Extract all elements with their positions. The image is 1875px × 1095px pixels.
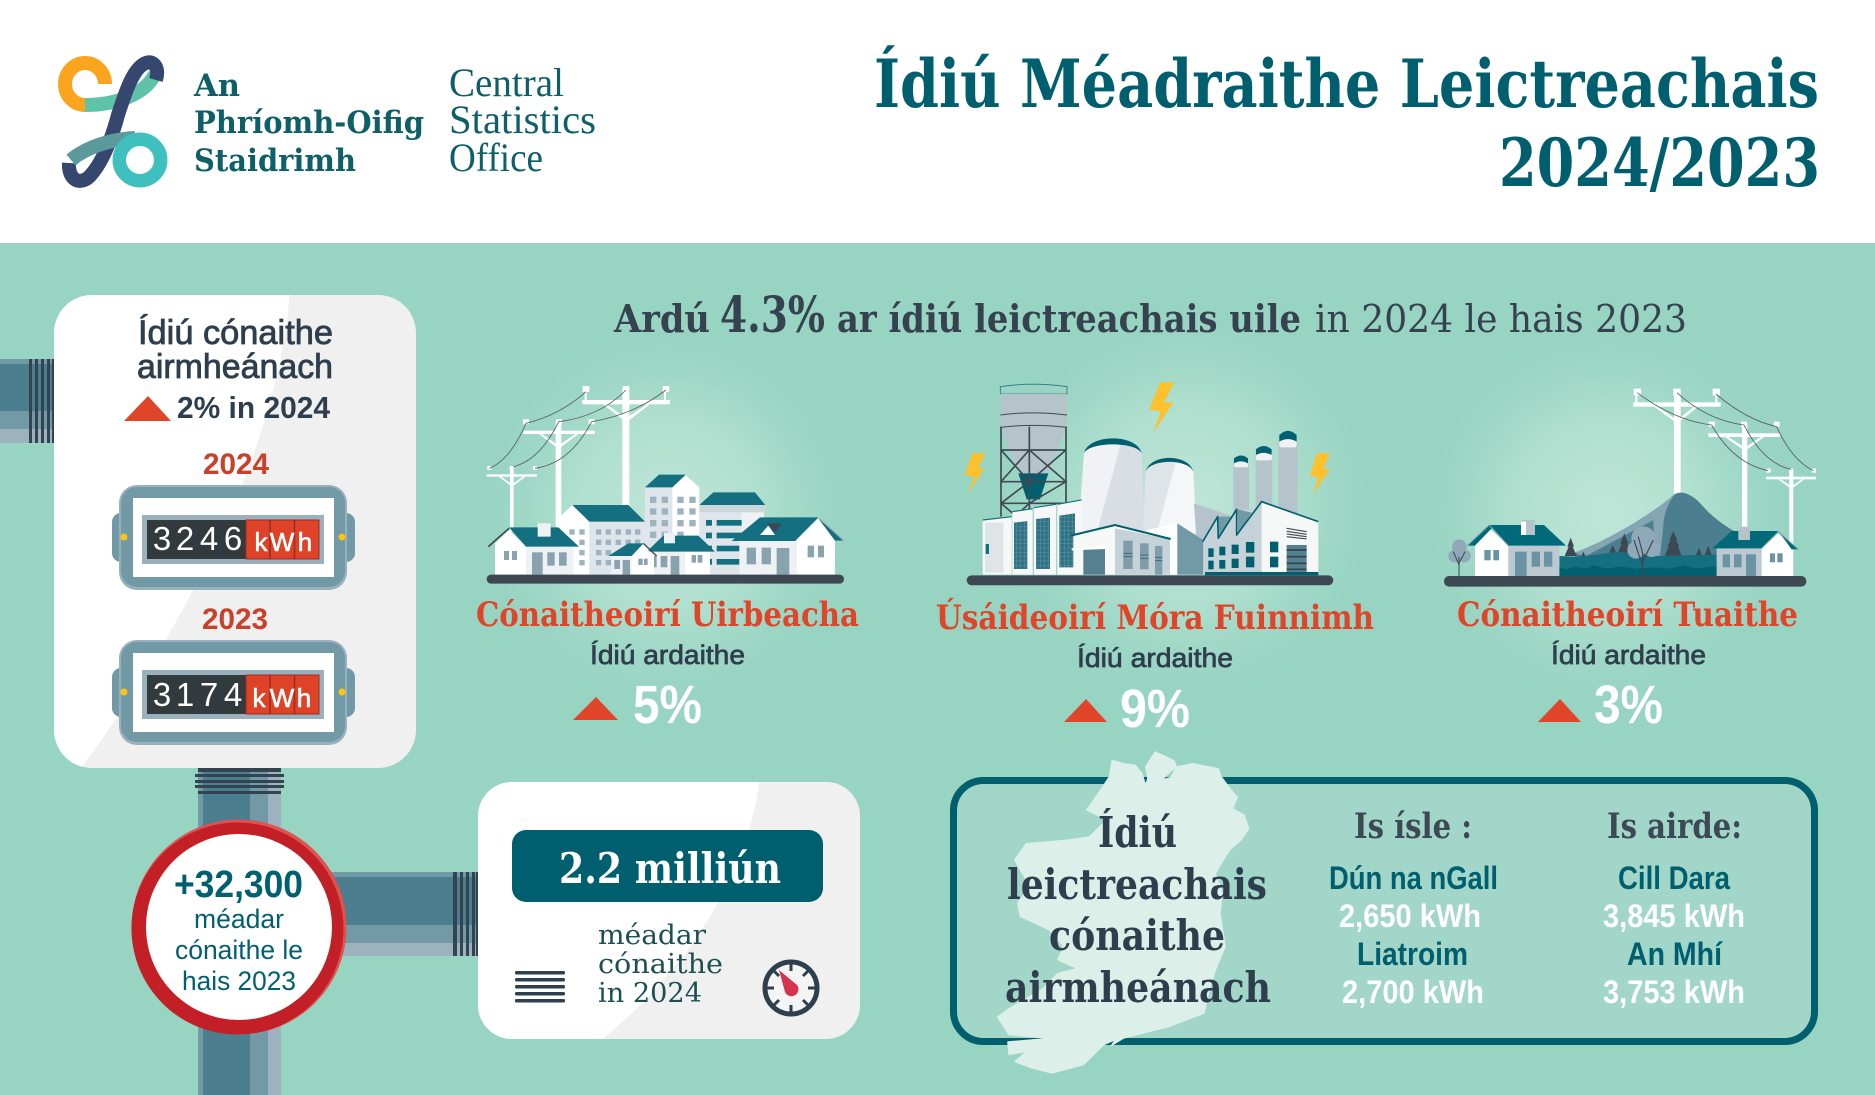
map caption: cónaithe [1049,911,1225,960]
logo wordmark English [449,60,596,180]
label: large energy users: Ídiú ardaithe [1077,643,1233,673]
meter 2024: k [254,527,268,557]
column: lowest: 2,700 kWh [1342,974,1484,1010]
headline: 4.3% increase [613,285,1687,344]
pipe: horizontal [330,872,478,956]
meter 2024: 6 [224,520,242,557]
label: urban [476,595,859,735]
illustration: urban residential [487,386,844,584]
logo wordmark Irish: Staidrimh [194,143,356,179]
glow behind rural illustration [1407,315,1807,715]
panel heading [137,314,333,386]
label: urban: 5% [633,675,702,735]
column: highest: An Mhí [1627,936,1723,972]
panel: lowest and highest consumption [954,752,1814,1073]
callout: +32,300 meters: hais 2023 [182,966,296,996]
column: highest [1603,806,1745,1010]
increase indicator: 2% in 2024 [177,390,331,425]
panel heading: Ídiú cónaithe [138,314,333,352]
callout: +32,300 meters: +32,300 [174,864,303,906]
glow behind urban illustration [467,315,867,715]
map caption: Ídiú [1098,807,1177,857]
headline: 4.3% increase: Ardú [613,296,710,341]
value banner [512,830,823,902]
label: urban: Cónaitheoirí Uirbeacha [476,595,859,635]
meter 2023 [112,640,355,745]
caption: méadar [598,920,706,951]
column: highest: 3,845 kWh [1603,898,1745,934]
column: lowest: Is ísle : [1354,806,1472,847]
caption: cónaithe [598,949,723,980]
year 2024: 2024 [203,448,269,481]
label: rural: Cónaitheoirí Tuaithe [1457,595,1798,635]
callout: +32,300 meters: méadar [194,904,284,934]
logo wordmark English: Central [449,60,564,105]
label: large energy users [936,597,1374,739]
meter 2023: 7 [200,676,218,713]
title [874,45,1820,202]
logo: CSO mark [65,62,161,181]
icon: lines [515,971,565,1002]
value banner: 2.2 milliún [559,844,781,893]
main teal background [0,243,1875,1095]
meter 2023: h [297,683,311,713]
meter 2023: 1 [176,676,194,713]
panel: average residential consumption [40,290,416,768]
logo wordmark Irish: An [193,68,240,104]
logo wordmark English: Statistics [449,97,596,142]
map caption: leictreachais [1007,860,1267,909]
pipe: vertical [195,767,284,1095]
illustration: rural residential [1444,389,1816,587]
logo wordmark Irish: Phríomh-Oifig [194,105,424,141]
meter 2024: W [270,527,295,557]
pipe: left stub [0,359,55,443]
column: lowest: Dún na nGall [1329,860,1498,896]
headline: 4.3% increase: ar ídiú leictreachais uile [837,296,1301,341]
headline: 4.3% increase: 4.3% [720,285,825,344]
map caption [1005,807,1271,1012]
logo wordmark Irish [193,68,424,179]
meter 2023: W [270,683,295,713]
map caption: airmheánach [1005,963,1271,1012]
column: highest: 3,753 kWh [1603,974,1745,1010]
panel heading: airmheánach [137,348,333,386]
meter 2023: 3 [153,676,171,713]
label: rural: 3% [1594,675,1663,735]
headline: 4.3% increase: in 2024 le hais 2023 [1315,297,1687,341]
panel: 2.2 million meters [470,775,860,1045]
logo wordmark English: Office [449,135,543,180]
header band [0,0,1875,243]
meter 2023: k [252,683,266,713]
meter 2024 [112,485,355,590]
illustration: industrial plant [965,382,1333,585]
callout: +32,300 meters: cónaithe le [175,935,303,965]
column: lowest: Liatroim [1357,936,1468,972]
meter 2024: h [298,527,312,557]
callout: +32,300 meters [132,820,346,1034]
column: highest: Cill Dara [1618,860,1730,896]
label: large energy users: Úsáideoirí Móra Fuinnimh [936,597,1374,638]
glow behind industrial illustration [982,300,1392,710]
map of Ireland [997,752,1249,1073]
label: urban: Ídiú ardaithe [590,640,745,670]
meter 2023: 4 [224,676,242,713]
label: large energy users: 9% [1120,679,1190,739]
column: lowest [1329,806,1498,1010]
meter 2024: 4 [200,520,218,557]
caption: in 2024 [598,978,702,1009]
meter 2024: 2 [176,520,194,557]
label: rural [1457,595,1798,735]
meter 2024: 3 [153,520,171,557]
year 2023: 2023 [202,603,268,636]
column: highest: Is airde: [1607,806,1742,847]
icon: gauge [765,962,817,1014]
label: rural: Ídiú ardaithe [1551,640,1706,670]
caption [598,920,723,1009]
column: lowest: 2,650 kWh [1339,898,1481,934]
